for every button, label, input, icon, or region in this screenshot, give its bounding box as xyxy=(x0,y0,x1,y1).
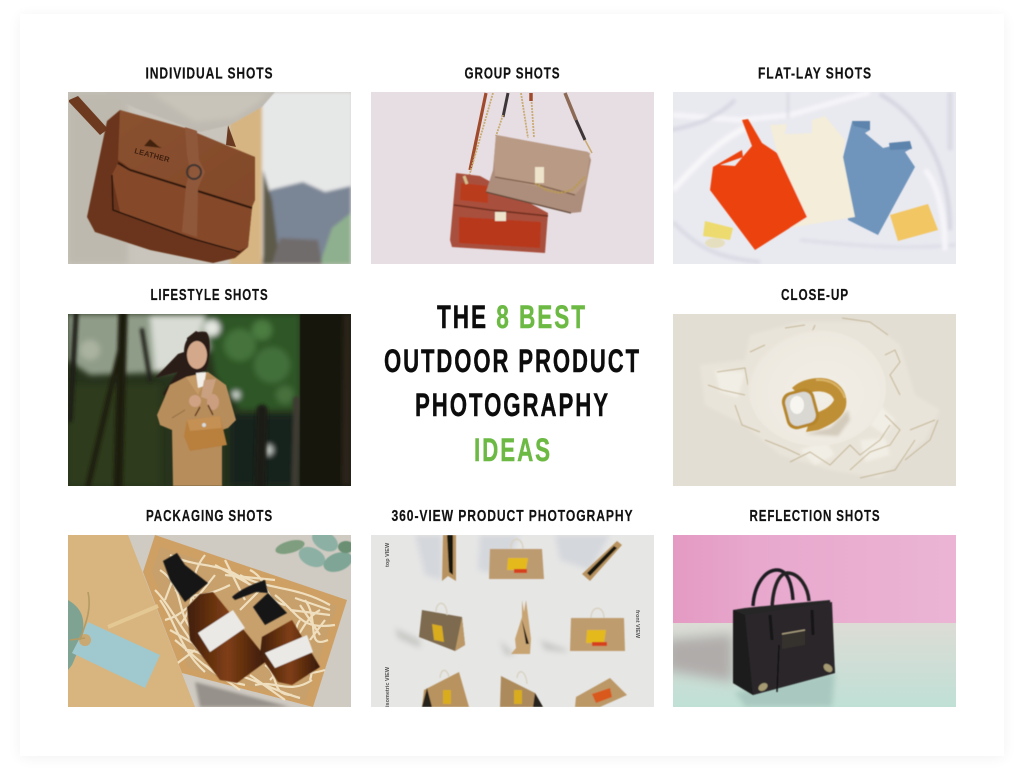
eucalyptus leaves xyxy=(274,526,355,576)
tag with twine xyxy=(108,606,158,627)
middle row xyxy=(419,610,465,651)
handles xyxy=(753,570,793,606)
kraft envelope xyxy=(68,535,195,707)
heading: group shots: GROUP SHOTS xyxy=(464,66,560,82)
heading: 360-view product photography: 360-VIEW PRODUCT PHOTOGRAPHY xyxy=(392,508,634,525)
cream top xyxy=(770,116,855,228)
photo: individual shot of leather bag xyxy=(68,92,351,264)
side labels: top VIEW xyxy=(385,542,391,567)
bottle 1 xyxy=(163,553,320,685)
heading: flat-lay shots: FLAT-LAY SHOTS xyxy=(758,66,872,82)
coat xyxy=(157,372,236,486)
phone and hands xyxy=(201,379,216,400)
photo: 360-view kraft bags: isometric VIEW xyxy=(385,666,391,707)
photo: reflection shot of black bag xyxy=(673,535,956,707)
top row xyxy=(442,535,456,581)
gold ring xyxy=(792,378,846,432)
yellow wallet xyxy=(890,204,938,241)
bottom row xyxy=(422,672,469,707)
embossed logo text: LEATHER xyxy=(133,146,172,165)
body xyxy=(733,600,835,695)
photo: 360-view kraft bags xyxy=(371,535,654,707)
photo: group shot of two bags xyxy=(371,92,654,264)
heading: close-up: CLOSE-UP xyxy=(781,287,849,304)
title: OUTDOOR PRODUCT xyxy=(384,343,641,379)
title: THE 8 BEST xyxy=(437,299,587,335)
heading: lifestyle shots: LIFESTYLE SHOTS xyxy=(150,287,268,304)
orange top xyxy=(710,119,807,250)
photo: flat-lay clothes on white sheet xyxy=(673,92,956,264)
photo: close-up of gold ring in powder xyxy=(673,314,956,486)
hair xyxy=(155,332,210,398)
handbag xyxy=(184,416,227,451)
heading: reflection shots: REFLECTION SHOTS xyxy=(750,508,880,525)
blue top xyxy=(843,122,915,235)
face xyxy=(187,341,207,369)
title: PHOTOGRAPHY xyxy=(415,387,610,423)
photo: packaging with amber bottles xyxy=(68,535,351,707)
title: IDEAS xyxy=(474,432,552,468)
heading: packaging shots: PACKAGING SHOTS xyxy=(146,508,273,525)
kraft box xyxy=(143,535,347,707)
bottle 2 xyxy=(260,620,320,685)
photo: woman with bag in forest xyxy=(68,314,351,486)
perfume xyxy=(703,221,733,240)
title xyxy=(384,299,641,468)
heading: individual shots: INDIVIDUAL SHOTS xyxy=(146,66,274,82)
photo: 360-view kraft bags: front VIEW xyxy=(634,610,640,639)
